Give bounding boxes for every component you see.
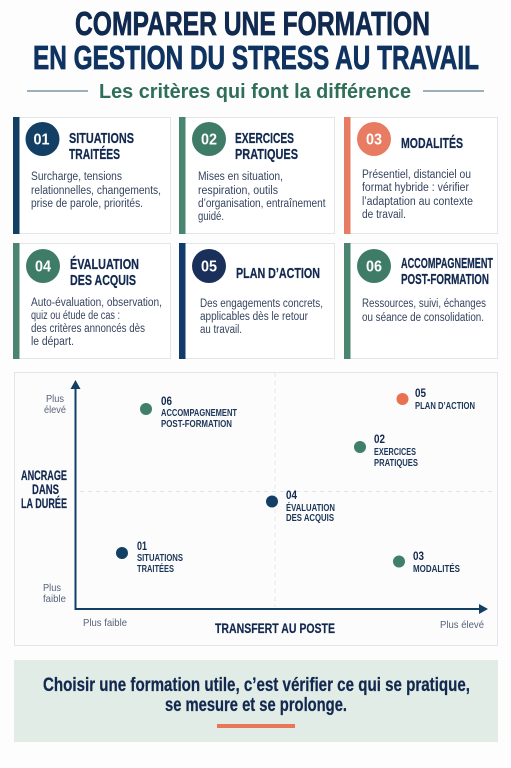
panel: 04 évaluation des acquis [13,243,170,359]
x axis high label: Plus élevé [440,619,484,631]
heading: évaluation des acquis: DES ACQUIS [70,272,136,289]
text: évaluation des acquis: des critères annoncés dès [31,323,145,335]
x axis low label: Plus faible [83,617,127,629]
point 02: EXERCICES [374,447,416,458]
x axis title: TRANSFERT AU POSTE [215,621,335,636]
heading: exercices pratiques: EXERCICES [235,130,294,147]
heading: situations traitées: SITUATIONS [69,130,134,147]
heading: exercices pratiques: PRATIQUES [235,146,298,163]
callout: conclusion: se mesure et se prolonge. [165,695,347,716]
panel: 01 situations traitées [13,117,170,234]
point 01: TRAITÉES [137,562,174,575]
icon: number 01 [26,122,60,156]
point 01: SITUATIONS [137,553,183,564]
heading: évaluation des acquis: ÉVALUATION [70,256,139,273]
text: évaluation des acquis: le départ. [31,336,74,348]
text: plan d'action: applicables dès le retour [200,311,308,323]
y axis title: DANS [32,482,59,497]
point 04: 04 [286,490,298,502]
text: accompagnement post-formation: ou séance de consolidation. [362,312,484,324]
point 06: POST-FORMATION [161,419,232,430]
text: situations traitées: Surcharge, tensions [31,171,122,183]
callout: conclusion [14,660,498,742]
point 05 [396,388,475,412]
text: exercices pratiques: respiration, outils [198,185,278,197]
y axis high label: élevé [44,404,66,416]
point 06: 06 [161,396,172,408]
heading: situations traitées: TRAITÉES [69,146,120,163]
heading: modalités: MODALITÉS [401,135,463,152]
text: évaluation des acquis: Auto-évaluation, observation, [31,297,162,309]
point 03: MODALITÉS [413,562,460,575]
y axis arrow [70,380,80,610]
text: situations traitées: prise de parole, priorités. [31,198,143,210]
point 03: 03 [413,551,424,563]
y axis title: LA DURÉE [21,496,67,511]
point 05: PLAN D’ACTION [415,401,475,412]
text: plan d'action: au travail. [200,324,242,336]
point 05: 05 [415,388,427,400]
icon: number 01: 01 [34,132,50,148]
y axis title [21,468,67,511]
icon: number 06: 06 [366,258,382,276]
panel: 06 accompagnement post-formation [344,243,498,359]
point 03 [393,551,460,575]
text: situations traitées: relationnelles, changements, [31,185,161,197]
text: modalités: de travail. [362,209,406,221]
text: exercices pratiques [198,171,326,223]
heading: situations traitées [69,130,134,163]
icon: number 03: 03 [366,132,382,148]
text: exercices pratiques: d’organisation, entraînement [198,198,326,210]
text: modalités [362,169,473,221]
y axis high label [44,393,66,416]
heading: plan d'action: PLAN D’ACTION [236,265,320,282]
subtitle: Les critères qui font la différence [99,81,411,103]
text: évaluation des acquis [31,297,162,348]
heading: exercices pratiques [235,130,298,163]
icon: number 02: 02 [201,132,217,148]
text: modalités: format hybride : vérifier [362,182,469,194]
icon: number 05: 05 [201,258,217,276]
heading: évaluation des acquis [70,256,139,289]
text: situations traitées [31,171,161,210]
text: modalités: l’adaptation au contexte [362,196,473,208]
chart: matrix transfert / ancrage [14,372,498,646]
y axis low label: Plus [43,582,61,594]
point 01: 01 [137,541,147,553]
icon: number 06 [357,249,391,283]
y axis title: ANCRAGE [21,468,67,483]
text: accompagnement post-formation [362,298,486,324]
text: modalités: Présentiel, distanciel ou [362,169,471,181]
point 06: ACCOMPAGNEMENT [161,408,237,419]
text: plan d'action [200,298,323,336]
text: évaluation des acquis: quiz ou étude de cas : [31,310,120,322]
icon: number 02 [192,122,226,156]
panel: 05 plan d'action [179,243,334,359]
heading: accompagnement post-formation [401,255,493,288]
y axis low label: faible [43,593,66,605]
y axis high label: Plus [46,393,64,405]
x axis arrow [75,604,488,614]
point 04: ÉVALUATION [286,501,335,514]
panel: 03 modalités [344,117,498,234]
point 06 [140,396,237,430]
text: accompagnement post-formation: Ressources, suivi, échanges [362,298,486,310]
y axis low label [43,582,66,605]
point 02 [354,434,418,469]
point 01 [116,541,183,575]
point 04: DES ACQUIS [286,513,334,524]
point 02: 02 [374,434,385,446]
icon: number 04 [26,249,60,283]
panel: 02 exercices pratiques [179,117,334,234]
title [33,5,479,76]
text: plan d'action: Des engagements concrets, [200,298,323,310]
text: exercices pratiques: Mises en situation, [198,171,283,183]
point 04 [266,490,335,524]
icon: number 04: 04 [35,258,51,276]
point 02: PRATIQUES [374,458,418,469]
icon: number 03 [357,122,391,156]
icon: number 05 [192,249,226,283]
text: exercices pratiques: guidé. [198,211,224,223]
